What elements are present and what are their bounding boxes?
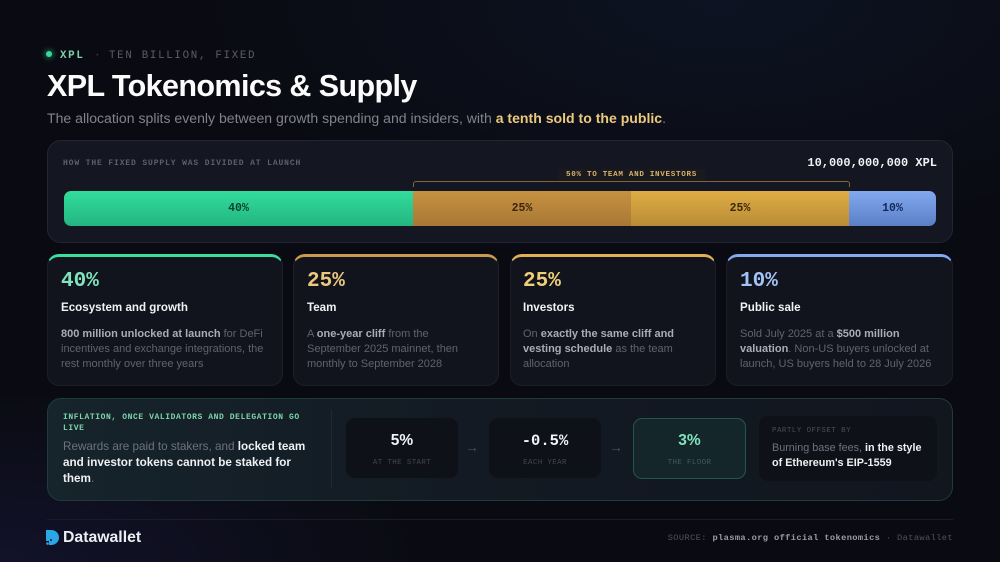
step: each year <box>489 418 601 478</box>
segment: public sale 10%: 10% <box>882 202 903 215</box>
card text <box>61 328 263 370</box>
segment: ecosystem 40% <box>64 191 413 226</box>
card percent: 25% <box>307 270 345 293</box>
icon: green status dot <box>46 51 52 57</box>
inflation text: them. <box>63 472 94 485</box>
card: investors <box>510 254 716 386</box>
source line: SOURCE: plasma.org official tokenomics · Datawallet <box>668 533 953 543</box>
inflation label: INFLATION, ONCE VALIDATORS AND DELEGATION GO <box>63 413 300 422</box>
card text: 800 million unlocked at launch for DeFi <box>61 328 263 340</box>
card text: A one-year cliff from the <box>307 328 429 340</box>
inflation label <box>63 413 300 433</box>
card: team <box>293 254 499 386</box>
step: the floor: THE FLOOR <box>668 459 711 467</box>
step: at the start <box>346 418 458 478</box>
arrow: → <box>609 439 623 455</box>
step: at the start: 5% <box>391 432 413 449</box>
step: the floor <box>633 418 746 479</box>
card text: incentives and exchange integrations, the <box>61 343 263 355</box>
step: each year: -0.5% <box>522 432 568 450</box>
bracket label <box>558 169 705 181</box>
card text: monthly to September 2028 <box>307 358 442 370</box>
step: at the start: AT THE START <box>373 459 431 467</box>
subtitle: The allocation splits evenly between growth spending and insiders, with a tenth sold to the public. <box>47 110 666 126</box>
card percent: 25% <box>523 270 561 293</box>
callout: partly offset by <box>759 416 937 481</box>
card: public sale <box>726 254 953 386</box>
card percent: 40% <box>61 270 99 293</box>
card text: allocation <box>523 358 569 370</box>
label: how supply was divided: HOW THE FIXED SUPPLY WAS DIVIDED AT LAUNCH <box>63 159 301 168</box>
card text: Sold July 2025 at a $500 million <box>740 328 900 340</box>
segment: investors 25% <box>631 191 849 226</box>
card text <box>307 328 458 370</box>
card heading: Investors <box>523 301 575 314</box>
logo: Datawallet <box>46 529 141 546</box>
card text: On exactly the same cliff and <box>523 328 674 340</box>
segment: team 25% <box>413 191 631 226</box>
panel: inflation <box>47 398 953 501</box>
card: ecosystem and growth <box>47 254 283 386</box>
segment: public sale 10% <box>849 191 936 226</box>
inflation text <box>63 440 305 485</box>
card text: rest monthly over three years <box>61 358 203 370</box>
card text: September 2025 mainnet, then <box>307 343 458 355</box>
title: XPL Tokenomics & Supply <box>47 69 417 103</box>
inflation text: and investor tokens cannot be staked for <box>63 456 291 469</box>
card heading: Public sale <box>740 301 801 314</box>
step: the floor: 3% <box>678 432 701 449</box>
card text: launch, US buyers held to 28 July 2026 <box>740 358 931 370</box>
card percent: 10% <box>740 270 778 293</box>
eyebrow: XPL ten billion fixed <box>42 47 256 62</box>
card text <box>740 328 931 370</box>
step: each year: EACH YEAR <box>523 459 567 467</box>
stacked bar <box>64 191 936 226</box>
total supply: 10,000,000,000 XPL <box>807 156 937 170</box>
segment: investors 25%: 25% <box>730 202 750 215</box>
card text: valuation. Non-US buyers unlocked at <box>740 343 929 355</box>
arrow: → <box>465 439 479 455</box>
segment: ecosystem 40%: 40% <box>228 202 249 215</box>
panel: supply allocation bar <box>47 140 953 243</box>
segment: team 25%: 25% <box>512 202 532 215</box>
eyebrow: XPL ten billion fixed: XPL <box>60 50 85 62</box>
inflation label: LIVE <box>63 424 85 433</box>
callout: partly offset by: Burning base fees, in the style <box>772 442 921 454</box>
eyebrow: XPL ten billion fixed: TEN BILLION, FIXED <box>109 50 256 62</box>
wordmark: Datawallet <box>63 529 141 546</box>
card heading: Ecosystem and growth <box>61 301 188 314</box>
bracket label: 50% TO TEAM AND INVESTORS <box>566 171 697 179</box>
eyebrow: XPL ten billion fixed: · <box>94 50 102 62</box>
inflation text: Rewards are paid to stakers, and locked team <box>63 440 305 453</box>
card heading: Team <box>307 301 336 314</box>
callout: partly offset by: of Ethereum's EIP-1559 <box>772 456 892 468</box>
card text <box>523 328 674 370</box>
icon: Datawallet mark <box>46 530 59 545</box>
bracket: team and investors <box>413 181 850 187</box>
callout: partly offset by: PARTLY OFFSET BY <box>772 427 851 435</box>
card text: vesting schedule as the team <box>523 343 673 355</box>
